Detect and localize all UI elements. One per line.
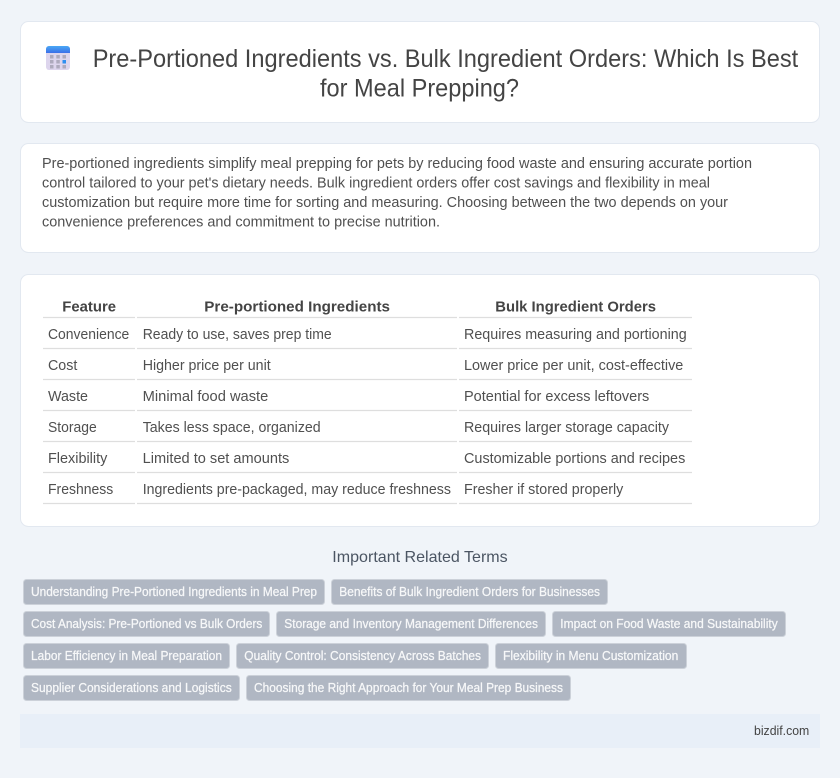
- tag: labor efficiency: [24, 644, 230, 668]
- tag: menu flexibility: Flexibility in Menu Customization: [503, 649, 678, 663]
- intro text block: control tailored to your pet's dietary needs. Bulk ingredient orders offer cost savings and flexibility in meal: [42, 176, 710, 192]
- table header row: Pre-portioned Ingredients: [204, 299, 390, 316]
- row: flexibility: Limited to set amounts: [143, 451, 289, 467]
- tag: understanding pre-portioned ingredients: [24, 580, 324, 604]
- row: flexibility: Flexibility: [48, 451, 108, 467]
- row: convenience: Convenience: [48, 327, 129, 343]
- row: convenience: Ready to use, saves prep time: [143, 327, 332, 343]
- table header row: [62, 299, 656, 316]
- panel: introduction: [20, 144, 820, 252]
- row: flexibility: Customizable portions and recipes: [464, 451, 685, 467]
- tag: supplier considerations: Supplier Considerations and Logistics: [31, 681, 232, 695]
- row: convenience: [48, 327, 687, 343]
- panel: title header: [20, 22, 820, 122]
- row: storage: Takes less space, organized: [143, 420, 321, 436]
- tag: benefits of bulk orders: [332, 580, 608, 604]
- intro text block: [42, 156, 752, 230]
- footer bar: [20, 714, 820, 748]
- tag: understanding pre-portioned ingredients: Understanding Pre-Portioned Ingredients in Meal Prep: [31, 585, 317, 599]
- tag: cost analysis: [24, 612, 270, 636]
- heading: important related terms: Important Related Terms: [332, 549, 508, 566]
- tag: benefits of bulk orders: Benefits of Bulk Ingredient Orders for Businesses: [339, 585, 600, 599]
- row: waste: Potential for excess leftovers: [464, 389, 649, 405]
- tag: food waste impact: [552, 612, 786, 636]
- intro text block: convenience preferences and commitment to precise nutrition.: [42, 214, 440, 230]
- row: cost: Cost: [48, 358, 77, 374]
- row: freshness: Freshness: [48, 482, 113, 498]
- intro text block: Pre-portioned ingredients simplify meal prepping for pets by reducing food waste and ensuring accurate portion: [42, 156, 752, 172]
- related terms tags: [24, 580, 786, 700]
- title: Pre-Portioned Ingredients vs. Bulk Ingredient Orders: Which Is Best: [93, 45, 798, 73]
- tag: labor efficiency: Labor Efficiency in Meal Preparation: [31, 649, 222, 663]
- table header row: Bulk Ingredient Orders: [495, 299, 656, 316]
- row: waste: [48, 389, 649, 405]
- row: convenience: Requires measuring and portioning: [464, 327, 687, 343]
- row: waste: Waste: [48, 389, 88, 405]
- tag: choosing the right approach: [246, 676, 570, 700]
- tag: quality control: [236, 644, 488, 668]
- row: cost: Lower price per unit, cost-effective: [464, 358, 683, 374]
- row: storage: Requires larger storage capacity: [464, 420, 670, 436]
- tag: food waste impact: Impact on Food Waste and Sustainability: [560, 617, 778, 631]
- tag: menu flexibility: [496, 644, 686, 668]
- row: flexibility: [48, 451, 685, 467]
- tag: supplier considerations: [24, 676, 240, 700]
- title: [93, 45, 798, 102]
- tag: choosing the right approach: Choosing the Right Approach for Your Meal Prep Business: [254, 681, 563, 695]
- row: freshness: Fresher if stored properly: [464, 482, 624, 498]
- tag: storage and inventory: [276, 612, 546, 636]
- tag: cost analysis: Cost Analysis: Pre-Portioned vs Bulk Orders: [31, 617, 262, 631]
- icon: calendar: [46, 46, 70, 70]
- panel: comparison table: [20, 274, 820, 526]
- tag: quality control: Quality Control: Consistency Across Batches: [244, 649, 481, 663]
- intro text block: customization but require more time for sorting and measuring. Choosing between the two depends on your: [42, 195, 728, 211]
- row: freshness: [48, 482, 624, 498]
- table header row: Feature: [62, 299, 116, 316]
- row: cost: [48, 358, 683, 374]
- title: for Meal Prepping?: [320, 74, 519, 102]
- tag: storage and inventory: Storage and Inventory Management Differences: [284, 617, 538, 631]
- row: storage: Storage: [48, 420, 97, 436]
- row: waste: Minimal food waste: [143, 389, 268, 405]
- row: freshness: Ingredients pre-packaged, may reduce freshness: [143, 482, 451, 498]
- row: storage: [48, 420, 670, 436]
- row: cost: Higher price per unit: [143, 358, 271, 374]
- footer source text: bizdif.com: [754, 724, 809, 738]
